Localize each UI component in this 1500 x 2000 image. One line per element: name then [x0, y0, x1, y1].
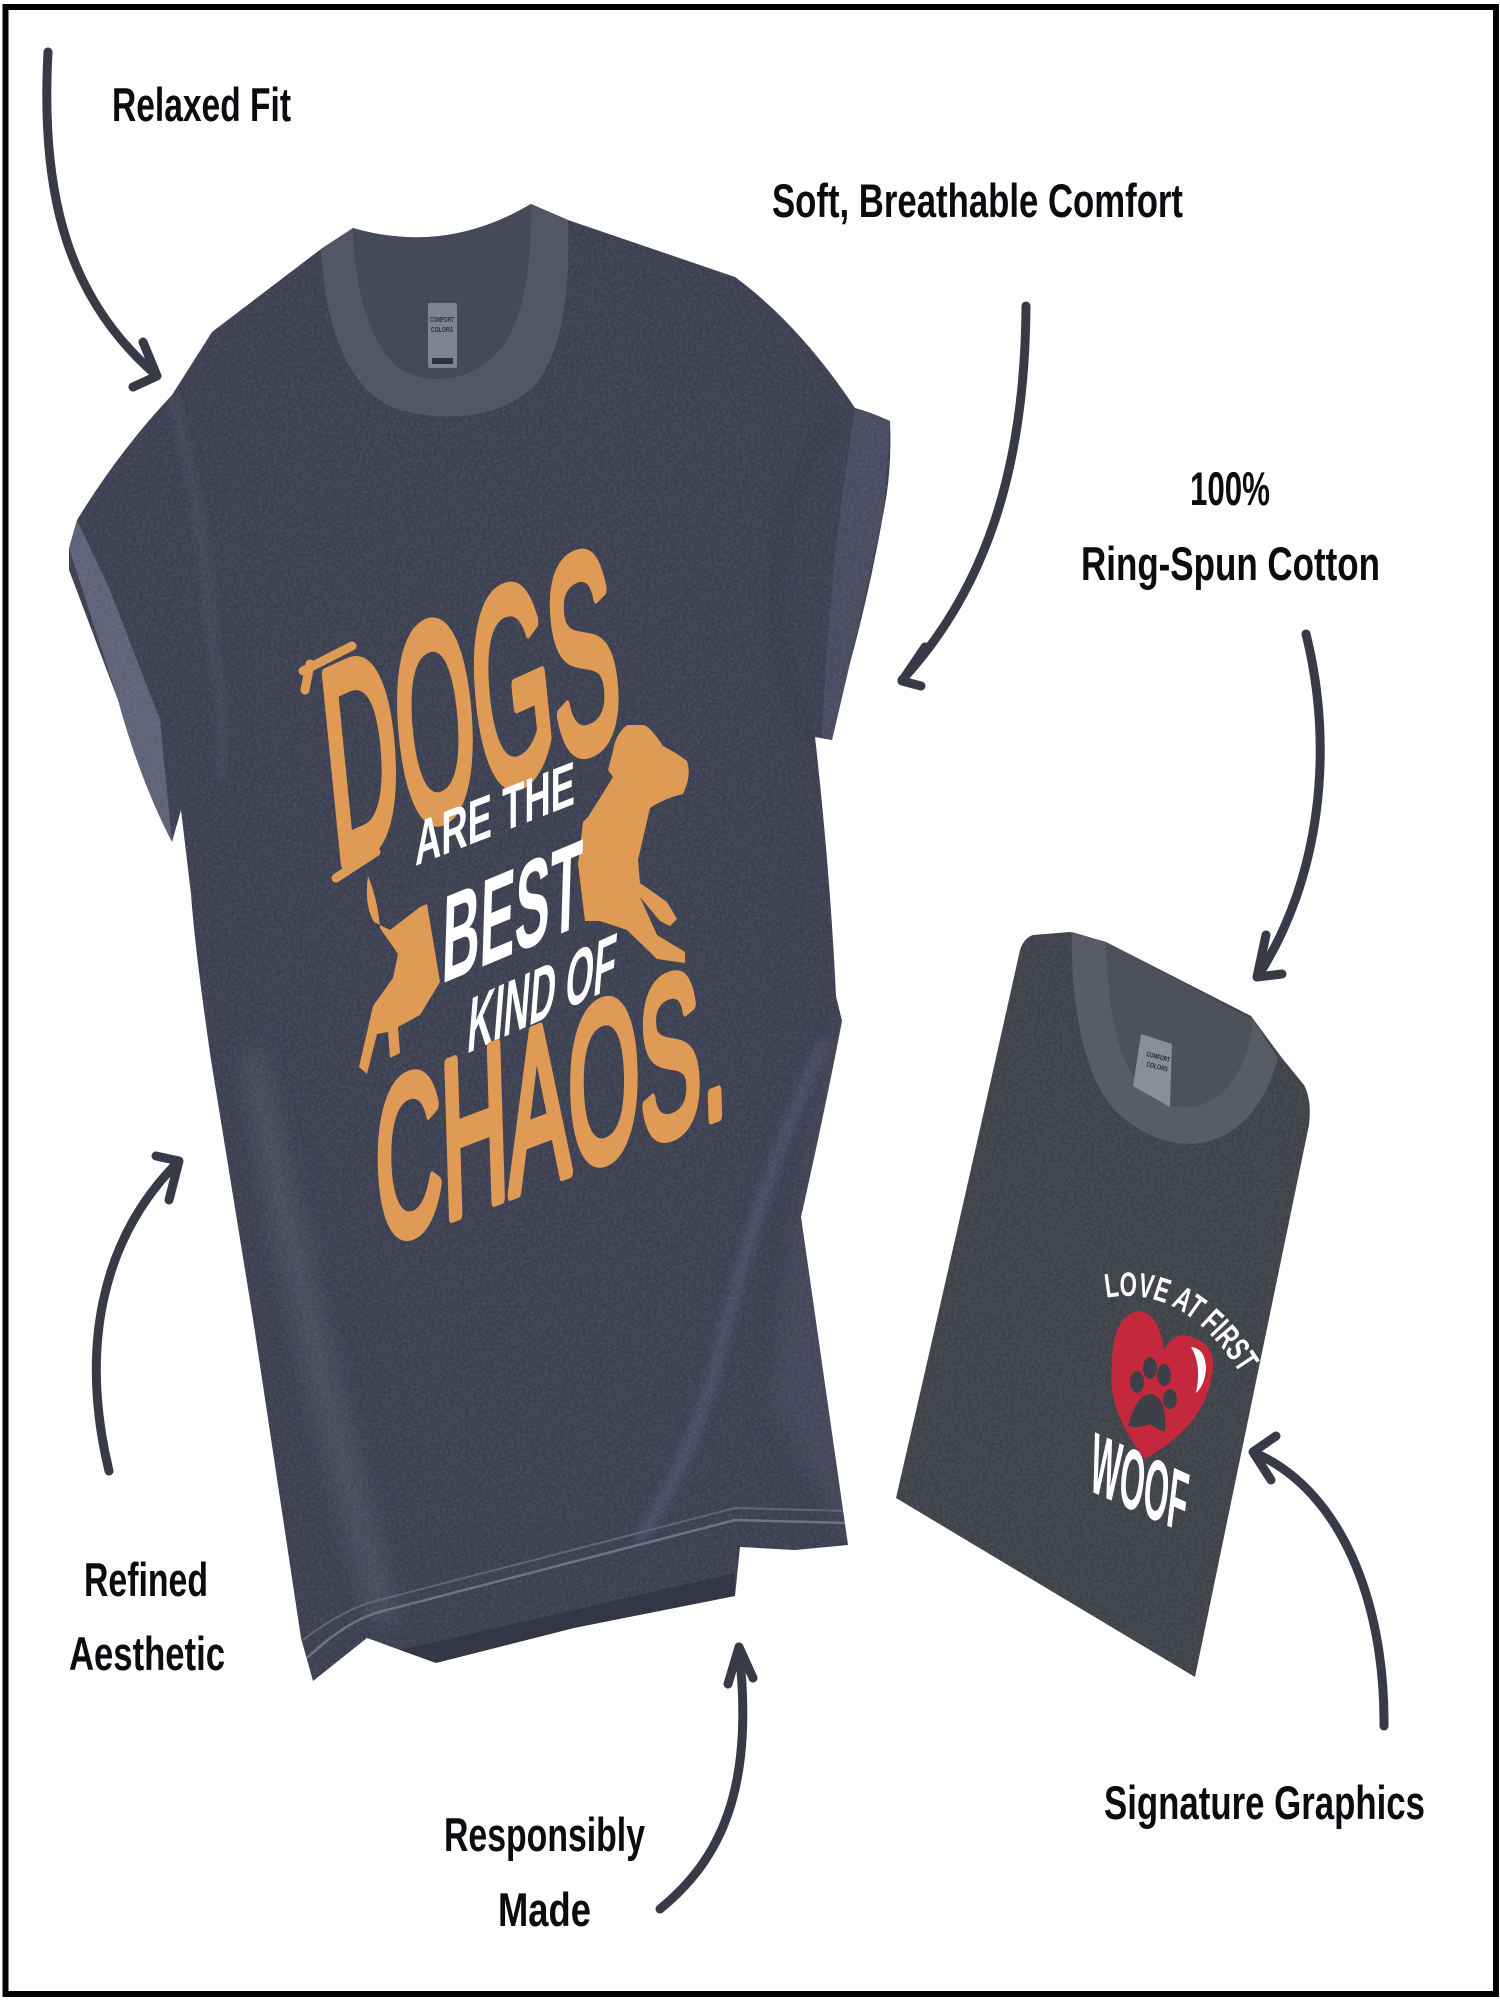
red heart — [1111, 1311, 1213, 1459]
shirt graphic: Dogs are the best kind of chaos: KIND OF — [465, 915, 620, 1071]
neck tag: COMFORT — [430, 317, 454, 324]
label: relaxed fit: Relaxed Fit — [112, 78, 291, 131]
arrow: relaxed fit — [47, 52, 157, 387]
neck tag — [428, 303, 457, 368]
label: refined aesthetic: Aesthetic — [69, 1627, 225, 1680]
shirt graphic: Dogs are the best kind of chaos: DOGS — [310, 486, 631, 924]
arrow: soft comfort — [902, 306, 1026, 686]
folded neck tag: COMFORT — [1145, 1051, 1171, 1064]
label: responsibly made: Made — [498, 1883, 591, 1936]
label: 100% ring-spun cotton — [1081, 462, 1380, 590]
dog silhouette rear — [359, 876, 440, 1074]
folded neck tag — [1133, 1034, 1172, 1107]
main t-shirt — [50, 190, 910, 1690]
shirt graphic: Dogs are the best kind of chaos: BEST — [440, 812, 584, 1011]
dog silhouette front — [578, 725, 689, 963]
ARE THE lettering: ARE THE — [415, 748, 575, 879]
folded shirt graphic: Love at first woof — [1086, 1272, 1260, 1551]
folded shirt graphic: Love at first woof: WOOF — [1086, 1414, 1193, 1551]
label: soft, breathable comfort: Soft, Breathable Comfort — [772, 174, 1183, 227]
shirt wash shading — [50, 190, 910, 1690]
folded neck tag: COLORS — [1145, 1061, 1169, 1074]
shirt graphic: Dogs are the best kind of chaos — [303, 486, 729, 1292]
label: responsibly made: Responsibly — [444, 1808, 645, 1861]
paw print — [1128, 1357, 1177, 1432]
folded shirt body — [896, 932, 1310, 1677]
neck tag: COLORS — [431, 327, 453, 334]
label: refined aesthetic: Refined — [84, 1553, 208, 1606]
heart highlight — [1191, 1347, 1206, 1393]
neck opening — [353, 204, 531, 379]
arched caption — [1106, 1296, 1250, 1390]
folded t-shirt — [896, 932, 1310, 1677]
arrow: responsibly made — [660, 1647, 753, 1909]
arrow: refined aesthetic — [96, 1156, 179, 1471]
collar ribbing — [321, 204, 568, 417]
arrow: signature graphics — [1253, 1436, 1384, 1726]
folded shirt wash texture — [890, 925, 1320, 1685]
label: refined aesthetic — [69, 1553, 225, 1680]
shirt body — [69, 204, 890, 1681]
main t-shirt: CHAOS. — [372, 911, 729, 1292]
label: 100% ring-spun cotton: 100% — [1190, 462, 1270, 515]
folded collar ribbing — [1072, 932, 1278, 1144]
folded neck opening — [1106, 942, 1253, 1107]
folded shirt graphic: Love at first woof: LOVE AT FIRST — [1104, 1272, 1260, 1370]
arrow: ring-spun cotton — [1257, 634, 1320, 977]
label: 100% ring-spun cotton: Ring-Spun Cotton — [1081, 537, 1380, 590]
label: responsibly made — [444, 1808, 645, 1936]
